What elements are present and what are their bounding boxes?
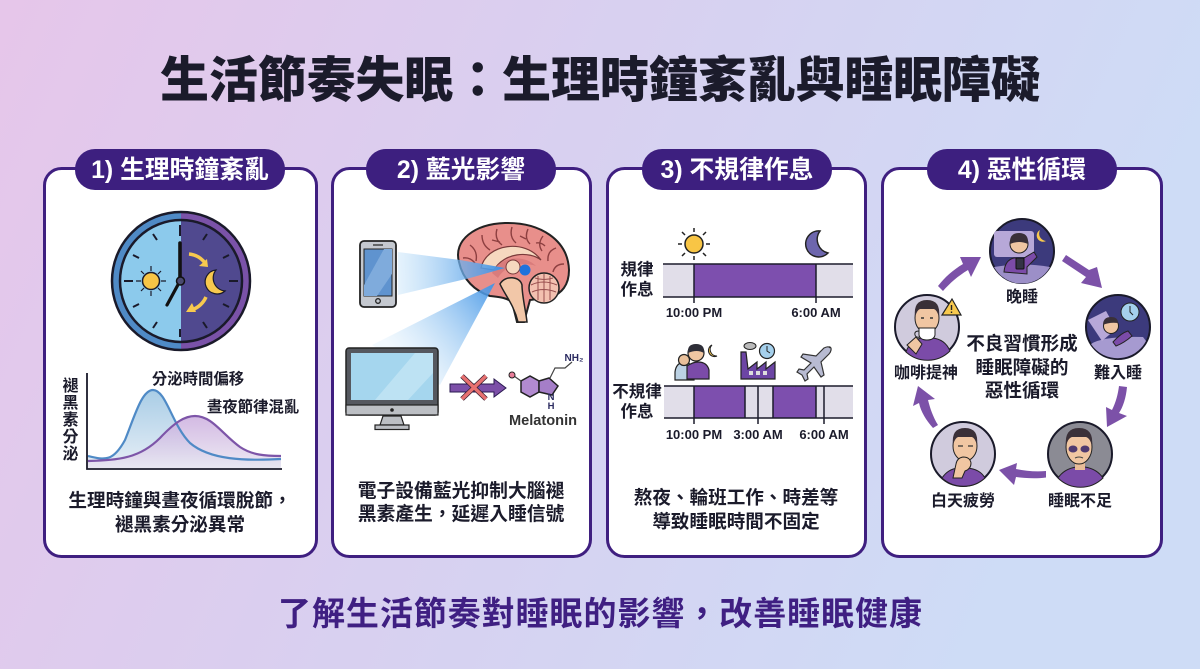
step: late sleep bbox=[990, 219, 1054, 306]
caption 1: 生理時鐘與晝夜循環脫節， bbox=[68, 490, 292, 511]
axis label: 素 bbox=[62, 411, 79, 429]
step: difficulty falling asleep bbox=[1086, 295, 1150, 382]
panel heading 2: 2) 藍光影響 bbox=[397, 156, 525, 184]
icon: brain bbox=[458, 223, 569, 322]
panel: 4 vicious cycle bbox=[882, 149, 1162, 556]
step: coffee: 咖啡提神 bbox=[894, 363, 958, 382]
caption 2 bbox=[358, 480, 565, 524]
timeline: regular schedule bbox=[663, 264, 853, 320]
caption 3: 導致睡眠時間不固定 bbox=[652, 511, 820, 532]
step: late sleep: 晚睡 bbox=[1006, 288, 1038, 306]
label: regular: 規律 bbox=[620, 260, 654, 279]
arrow bbox=[1062, 255, 1102, 288]
cycle center text: 睡眠障礙的 bbox=[976, 357, 1068, 378]
label: regular: 作息 bbox=[620, 279, 654, 299]
icon: melatonin molecule: H bbox=[548, 401, 555, 412]
axis label: 褪 bbox=[62, 376, 79, 395]
axis label: 泌 bbox=[62, 445, 79, 463]
caption 2: 黑素產生，延遲入睡信號 bbox=[358, 502, 565, 524]
icon: melatonin molecule bbox=[509, 353, 583, 412]
timeline: irregular schedule: 6:00 AM bbox=[799, 427, 849, 442]
caption 1: 褪黑素分泌異常 bbox=[115, 514, 245, 535]
title: 生活節奏失眠：生理時鐘紊亂與睡眠障礙 bbox=[160, 54, 1040, 108]
cycle center text: 惡性循環 bbox=[985, 380, 1060, 401]
step: sleep deprivation bbox=[1048, 422, 1112, 510]
axis label: 黑 bbox=[62, 394, 79, 412]
panel heading 4: 4) 惡性循環 bbox=[958, 156, 1086, 184]
panel heading 1: 1) 生理時鐘紊亂 bbox=[91, 155, 269, 184]
icon: melatonin molecule: NH₂ bbox=[565, 353, 583, 364]
step: coffee bbox=[894, 295, 961, 382]
icon: desktop monitor bbox=[346, 348, 438, 430]
icon: night shift people bbox=[675, 344, 717, 380]
cycle center text bbox=[966, 333, 1078, 401]
panel heading 3: 3) 不規律作息 bbox=[661, 156, 813, 184]
axis label bbox=[62, 376, 79, 463]
footer takeaway: 了解生活節奏對睡眠的影響，改善睡眠健康 bbox=[278, 595, 922, 632]
icon: phone light beam bbox=[398, 252, 505, 295]
arrow bbox=[1106, 386, 1127, 427]
icon: blocked arrow bbox=[450, 376, 506, 399]
label: Melatonin: Melatonin bbox=[509, 413, 577, 429]
panel: 2 blue light bbox=[332, 149, 590, 556]
timeline: irregular schedule: 3:00 AM bbox=[733, 427, 783, 442]
cycle center text: 不良習慣形成 bbox=[966, 333, 1078, 354]
timeline: irregular schedule: 10:00 PM bbox=[666, 427, 722, 442]
axis label: 分 bbox=[62, 428, 79, 446]
timeline: regular schedule: 10:00 PM bbox=[666, 305, 722, 320]
caption 3: 熬夜、輪班工作、時差等 bbox=[634, 487, 838, 508]
label: irregular: 作息 bbox=[620, 401, 654, 421]
icon: monitor light beam bbox=[372, 283, 495, 385]
caption 1 bbox=[68, 490, 292, 535]
label: irregular: 不規律 bbox=[612, 382, 662, 401]
icon: moon bbox=[806, 231, 828, 257]
icon: airplane bbox=[797, 347, 831, 381]
icon: sun bbox=[678, 228, 710, 260]
icon: melatonin molecule: N bbox=[548, 392, 555, 403]
step: difficulty falling asleep: 難入睡 bbox=[1094, 364, 1142, 382]
icon: factory and clock bbox=[741, 342, 775, 379]
chart annotation: rhythm disorder: 晝夜節律混亂 bbox=[207, 397, 299, 416]
caption 2: 電子設備藍光抑制大腦褪 bbox=[358, 480, 565, 501]
label: regular bbox=[620, 260, 654, 299]
arrow bbox=[938, 257, 981, 291]
panel heading 3 bbox=[642, 149, 832, 190]
panel heading 1 bbox=[75, 149, 285, 190]
icon: smartphone bbox=[360, 241, 396, 307]
panel: 1 circadian misalignment bbox=[44, 149, 316, 556]
label: irregular bbox=[612, 382, 662, 421]
arrow bbox=[999, 463, 1046, 485]
step: daytime fatigue bbox=[931, 422, 995, 510]
timeline: irregular schedule bbox=[664, 386, 853, 442]
icon: day-night clock bbox=[112, 212, 250, 350]
chart annotation: shift: 分泌時間偏移 bbox=[152, 370, 244, 388]
timeline: regular schedule: 6:00 AM bbox=[791, 305, 841, 320]
chart: melatonin secretion curves bbox=[62, 370, 299, 469]
panel heading 4 bbox=[927, 149, 1117, 190]
arrow bbox=[913, 386, 938, 428]
step: daytime fatigue: 白天疲勞 bbox=[931, 491, 995, 510]
caption 3 bbox=[634, 487, 838, 532]
panel: 3 irregular schedule bbox=[608, 149, 866, 556]
step: sleep deprivation: 睡眠不足 bbox=[1048, 492, 1112, 510]
panel heading 2 bbox=[366, 149, 556, 190]
